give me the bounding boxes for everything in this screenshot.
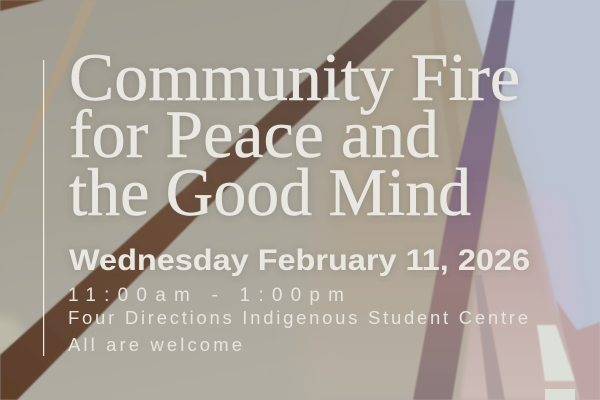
title: [69, 39, 520, 230]
tent canvas panel: [440, 0, 589, 400]
window: [537, 325, 575, 381]
sky area: [440, 0, 600, 400]
thin second post: [474, 275, 505, 400]
top left beam: [0, 0, 45, 11]
date: Wednesday February 11, 2026: [69, 244, 530, 277]
lower right curtain: [556, 300, 600, 400]
tan canvas section: [341, 0, 526, 247]
faint inner post: [430, 1, 461, 176]
lower left pale canvas: [0, 317, 24, 353]
lilac haze by sky edge: [528, 199, 558, 312]
far left tan strip: [0, 0, 97, 216]
title: the Good Mind: [69, 154, 471, 230]
window lower pane: [545, 389, 575, 400]
title: Community Fire: [69, 39, 520, 115]
location: Four Directions Indigenous Student Centre: [68, 307, 528, 328]
pink light wash: [460, 191, 580, 400]
welcome note: All are welcome: [68, 334, 242, 355]
time: 11:00am - 1:00pm: [68, 285, 344, 306]
right vertical post: [413, 0, 515, 400]
title: for Peace and: [69, 96, 439, 172]
main diagonal beam: [0, 0, 428, 400]
vertical rule: [43, 60, 44, 356]
